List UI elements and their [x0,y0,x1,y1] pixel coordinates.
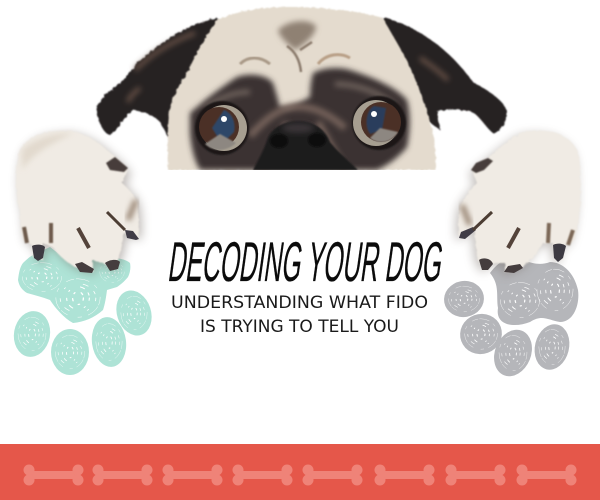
right eye [352,96,406,150]
head [168,7,436,170]
right ear [372,18,507,134]
left paw upper shading [22,133,73,170]
grey scribble paw print [441,254,578,382]
eye and muzzle mask [190,68,410,170]
right paw claws [471,158,493,173]
pug face photo illustration [97,7,507,170]
right paw [455,130,581,276]
forehead wrinkles [278,21,316,50]
left paw [16,131,142,275]
brow fur highlights [205,84,395,108]
left ear [97,18,228,137]
footer band with bones [0,444,600,500]
ear highlights [128,33,448,102]
subtitle [171,293,428,336]
nose bridge fur [250,107,345,170]
left eye [195,101,249,155]
subtitle: IS TRYING TO TELL YOU [200,317,399,336]
mint scribble paw print [10,247,157,375]
left paw claws [106,157,128,172]
nose [253,121,358,170]
subtitle: UNDERSTANDING WHAT FIDO [171,293,428,312]
